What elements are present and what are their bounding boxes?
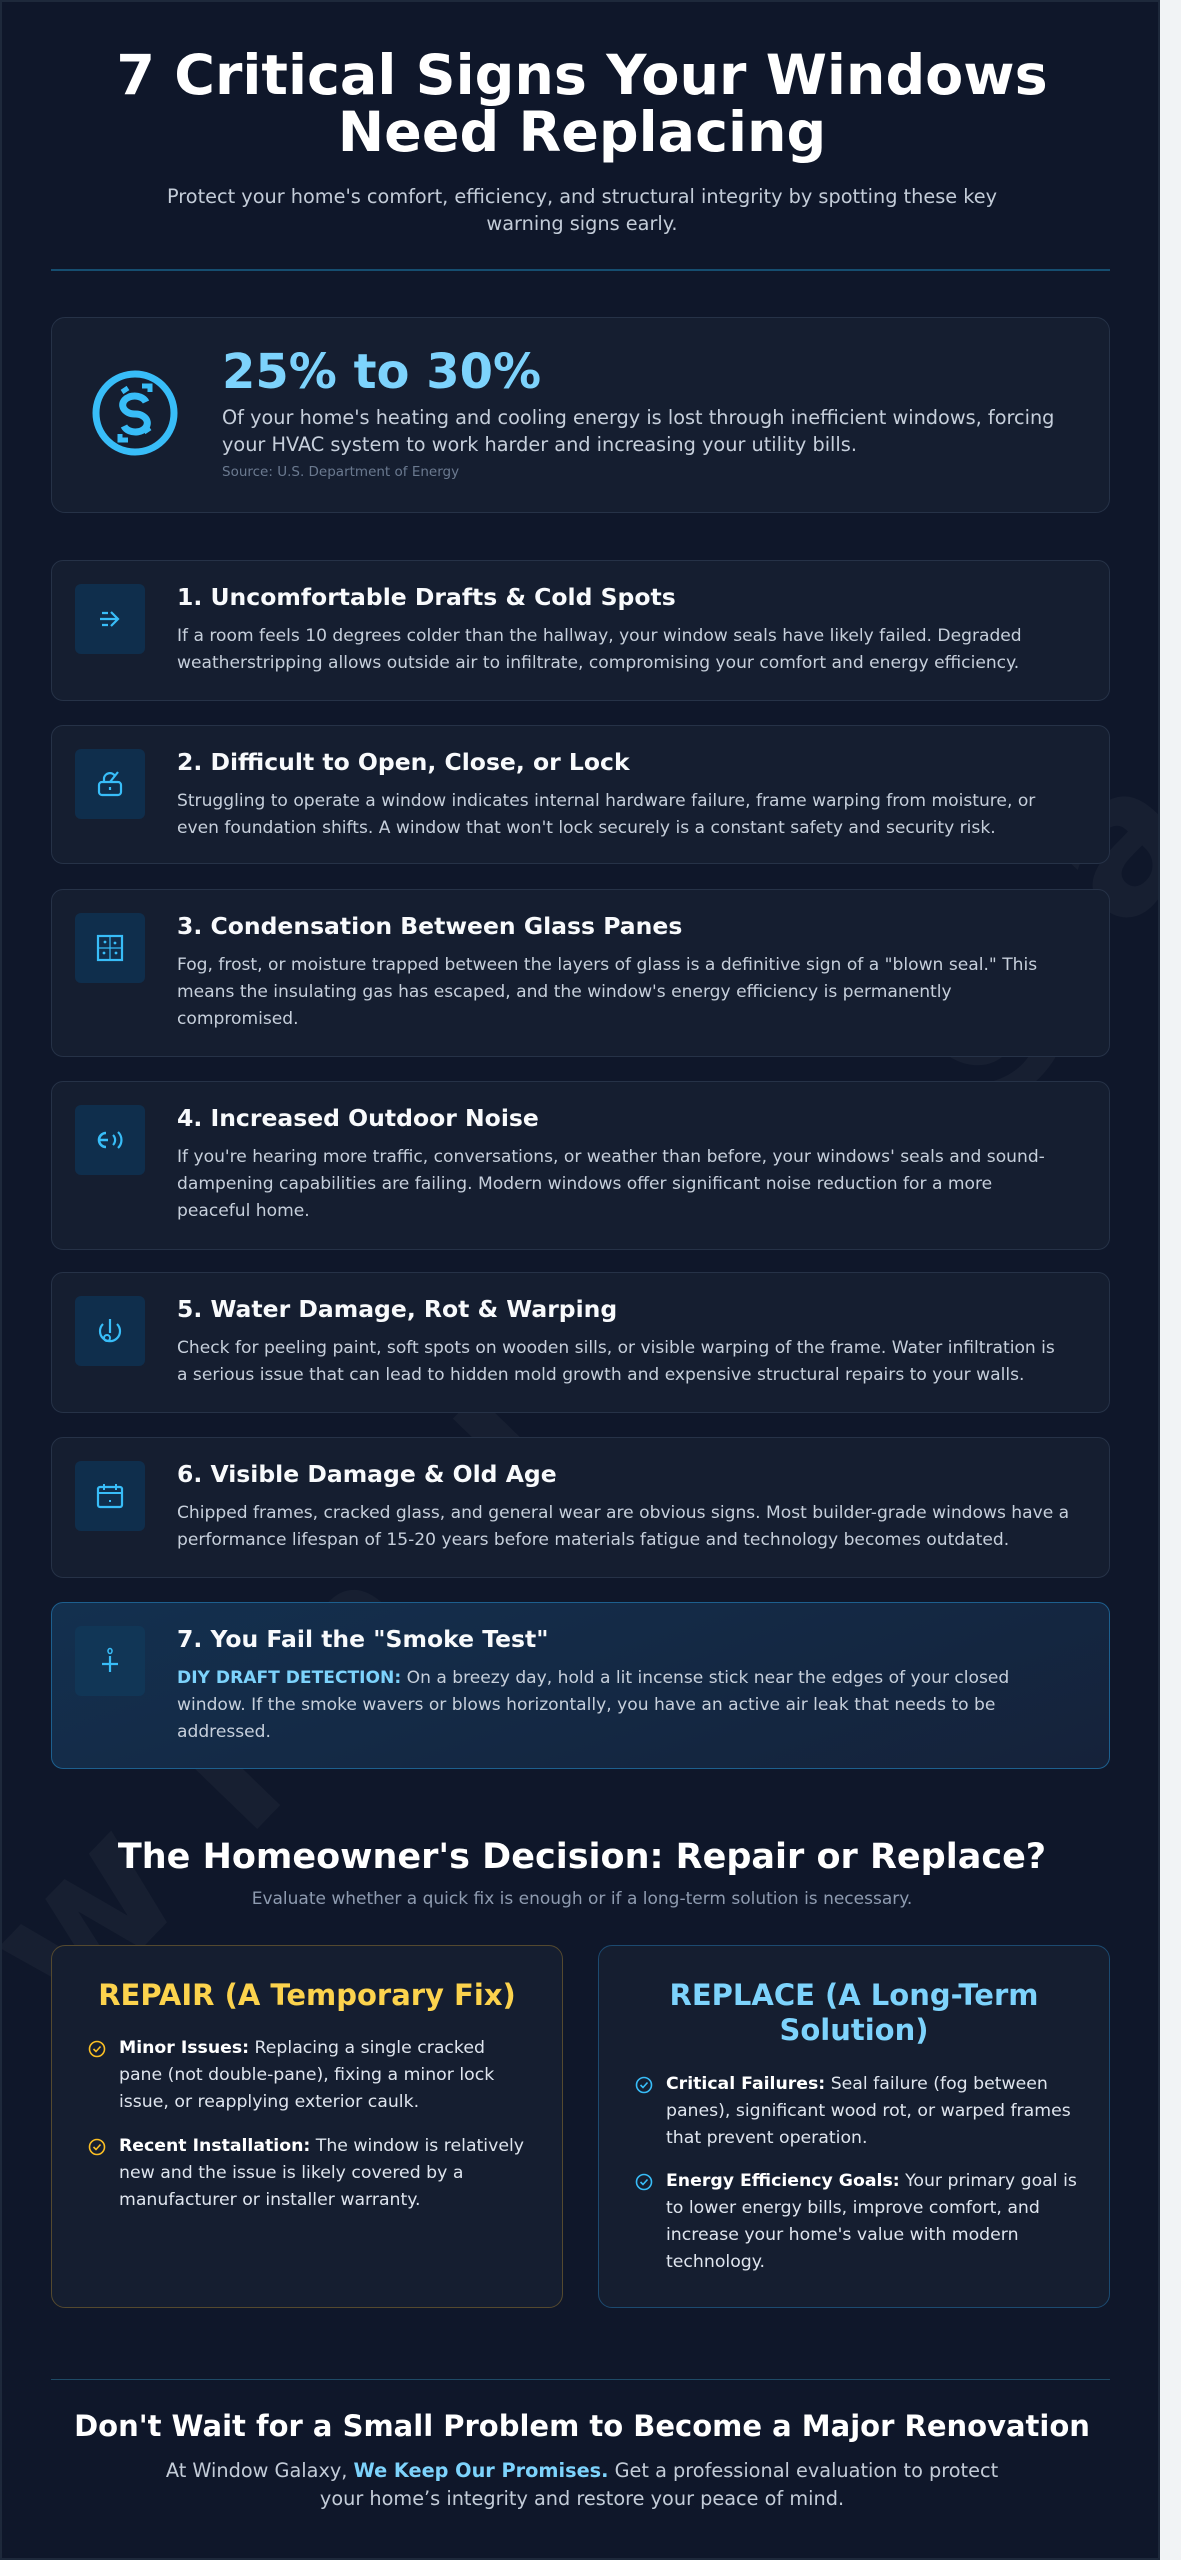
replace bullet 2: to lower energy bills, improve comfort, and — [666, 2198, 1040, 2218]
replace bullet 2: Energy Efficiency Goals: Your primary goal is — [666, 2171, 1077, 2191]
replace bullet 2: increase your home's value with modern — [666, 2225, 1019, 2245]
card 2 — [51, 725, 1110, 864]
card 2: even foundation shifts. A window that won't lock securely is a constant safety and security risk. — [177, 818, 996, 838]
replace bullet 1: Critical Failures: Seal failure (fog between — [666, 2074, 1048, 2094]
repair bullet 1: pane (not double-pane), fixing a minor lock — [119, 2065, 494, 2085]
card 6: 6. Visible Damage & Old Age — [177, 1460, 557, 1488]
panel: replace: REPLACE (A Long-Term Solution) — [670, 1978, 1038, 2047]
footer heading: Don't Wait for a Small Problem to Become a Major Renovation — [74, 2409, 1090, 2443]
card 4: dampening capabilities are failing. Modern windows offer significant noise reduction for a more — [177, 1174, 992, 1194]
replace bullet 1: that prevent operation. — [666, 2128, 867, 2148]
card 5 — [51, 1272, 1110, 1413]
card 6 — [51, 1437, 1110, 1578]
icon: draft arrow — [75, 584, 145, 654]
panel: replace — [598, 1945, 1110, 2308]
footer text: your home’s integrity and restore your peace of mind. — [320, 2487, 844, 2510]
replace bullet 2 — [636, 2171, 1077, 2272]
stat number: 25% to 30% — [222, 344, 541, 400]
card 3: means the insulating gas has escaped, and the window's energy efficiency is permanently — [177, 982, 952, 1002]
card 1: 1. Uncomfortable Drafts & Cold Spots — [177, 583, 676, 611]
card 5: 5. Water Damage, Rot & Warping — [177, 1295, 617, 1323]
card 6: Chipped frames, cracked glass, and general wear are obvious signs. Most builder-grade windows have a — [177, 1503, 1069, 1523]
card 3 — [51, 889, 1110, 1057]
card 7 highlight: addressed. — [177, 1722, 271, 1742]
panel: statistic — [51, 317, 1110, 513]
repair bullet 2 — [88, 2136, 524, 2210]
title: Need Replacing — [338, 100, 826, 165]
card 3: 3. Condensation Between Glass Panes — [177, 912, 682, 940]
replace bullet 1 — [636, 2074, 1071, 2148]
repair bullet 2: Recent Installation: The window is relatively — [119, 2136, 524, 2156]
stat description: Of your home's heating and cooling energy is lost through inefficient windows, forcing your HVAC system to work harder and increasing your utility bills. — [222, 406, 1054, 456]
icon: calendar — [75, 1461, 145, 1531]
card 7 highlight: DIY DRAFT DETECTION: On a breezy day, hold a lit incense stick near the edges of your closed — [177, 1668, 1009, 1688]
decision subtitle: Evaluate whether a quick fix is enough or if a long-term solution is necessary. — [252, 1889, 912, 1909]
footer text: At Window Galaxy, We Keep Our Promises. Get a professional evaluation to protect — [166, 2459, 998, 2482]
card 6: performance lifespan of 15-20 years before materials fatigue and technology becomes outdated. — [177, 1530, 1009, 1550]
card 4: 4. Increased Outdoor Noise — [177, 1104, 539, 1132]
card 4 — [51, 1081, 1110, 1250]
subtitle: warning signs early. — [486, 212, 678, 235]
subtitle — [167, 185, 997, 235]
card 3: compromised. — [177, 1009, 299, 1029]
repair bullet 2: manufacturer or installer warranty. — [119, 2190, 421, 2210]
card 7 highlight: window. If the smoke wavers or blows horizontally, you have an active air leak that needs to be — [177, 1695, 995, 1715]
title: 7 Critical Signs Your Windows — [116, 43, 1048, 108]
footer text — [166, 2459, 998, 2510]
title — [116, 43, 1048, 165]
card 7 highlight: 7. You Fail the "Smoke Test" — [177, 1625, 549, 1653]
replace bullet 1: panes), significant wood rot, or warped frames — [666, 2101, 1071, 2121]
card 5: Check for peeling paint, soft spots on wooden sills, or visible warping of the frame. Water infiltration is — [177, 1338, 1055, 1358]
card 1: weatherstripping allows outside air to infiltrate, compromising your comfort and energy efficiency. — [177, 653, 1019, 673]
repair bullet 1: Minor Issues: Replacing a single cracked — [119, 2038, 485, 2058]
icon: sound — [75, 1105, 145, 1175]
icon: water damage — [75, 1296, 145, 1366]
replace bullet 2: technology. — [666, 2252, 765, 2272]
icon: fogged window — [75, 913, 145, 983]
card 5: a serious issue that can lead to hidden mold growth and expensive structural repairs to your walls. — [177, 1365, 1024, 1385]
repair bullet 1 — [88, 2038, 494, 2112]
card 1: If a room feels 10 degrees colder than the hallway, your window seals have likely failed. Degraded — [177, 626, 1022, 646]
icon: lock — [75, 749, 145, 819]
icon: dollar energy — [92, 370, 178, 456]
decision heading: The Homeowner's Decision: Repair or Replace? — [118, 1837, 1046, 1877]
subtitle: Protect your home's comfort, efficiency, and structural integrity by spotting these key — [167, 185, 997, 208]
source: Source: U.S. Department of Energy — [222, 464, 459, 480]
panel: repair: REPAIR (A Temporary Fix) — [98, 1978, 516, 2012]
card 7 highlight — [51, 1602, 1110, 1769]
card 2: 2. Difficult to Open, Close, or Lock — [177, 748, 630, 776]
card 2: Struggling to operate a window indicates internal hardware failure, frame warping from moisture, or — [177, 791, 1035, 811]
card 4: If you're hearing more traffic, conversations, or weather than before, your windows' seals and sound- — [177, 1147, 1045, 1167]
repair bullet 1: issue, or reapplying exterior caulk. — [119, 2092, 419, 2112]
card 1 — [51, 560, 1110, 701]
panel: repair — [51, 1945, 563, 2308]
card 4: peaceful home. — [177, 1201, 310, 1221]
icon: incense smoke — [75, 1626, 145, 1696]
repair bullet 2: new and the issue is likely covered by a — [119, 2163, 463, 2183]
card 3: Fog, frost, or moisture trapped between the layers of glass is a definitive sign of a "blown seal." This — [177, 955, 1037, 975]
